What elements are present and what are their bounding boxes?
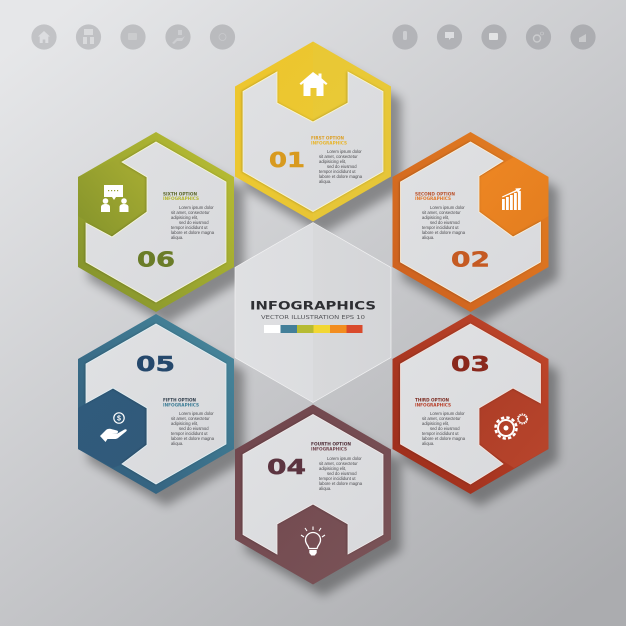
label bbox=[311, 442, 351, 452]
icon: hand and coin bbox=[100, 413, 127, 442]
label bbox=[415, 192, 455, 201]
body text: labore et dolore magna bbox=[171, 436, 215, 441]
body text: sit amet, consectetur bbox=[171, 416, 210, 421]
body text: aliqua. bbox=[422, 235, 434, 240]
body text: tempor incididunt ut bbox=[171, 225, 208, 230]
label: INFOGRAPHICS bbox=[163, 402, 199, 408]
icon: clock bbox=[210, 24, 235, 50]
icon: camera bbox=[120, 24, 146, 50]
body text: labore et dolore magna bbox=[171, 230, 215, 235]
body text: Lorem ipsum dolor bbox=[430, 205, 465, 210]
body text: tempor incididunt ut bbox=[319, 476, 356, 481]
body text: sed do eiusmod bbox=[430, 426, 460, 431]
body text: sed do eiusmod bbox=[179, 220, 209, 225]
body text: aliqua. bbox=[171, 441, 183, 446]
body text: adipisicing elit, bbox=[171, 421, 198, 426]
icon: home bbox=[300, 72, 328, 96]
icon: gears bbox=[496, 414, 528, 438]
icon: people bbox=[76, 24, 101, 50]
inner card bbox=[86, 142, 226, 302]
label bbox=[163, 192, 199, 201]
inner card bbox=[86, 324, 226, 484]
icon: hand bbox=[165, 24, 191, 50]
body text: sit amet, consectetur bbox=[422, 210, 461, 215]
body text: Lorem ipsum dolor bbox=[179, 205, 214, 210]
body text: adipisicing elit, bbox=[319, 466, 346, 471]
icon: home bbox=[31, 24, 57, 50]
number: 03 bbox=[451, 352, 490, 376]
number: 05 bbox=[136, 352, 175, 376]
label: INFOGRAPHICS bbox=[311, 140, 347, 146]
panel: option 3 bbox=[392, 314, 548, 494]
inner card bbox=[400, 324, 540, 484]
body text: sit amet, consectetur bbox=[319, 154, 358, 159]
label: SECOND OPTION bbox=[415, 192, 455, 196]
label: INFOGRAPHICS bbox=[311, 446, 347, 452]
center hexagon panel bbox=[235, 222, 391, 402]
icon background hexagon bbox=[78, 388, 147, 468]
icon: speech bbox=[437, 24, 462, 50]
label: FOURTH OPTION bbox=[311, 442, 351, 446]
inner card bbox=[243, 414, 383, 554]
body text: labore et dolore magna bbox=[422, 230, 466, 235]
panel: option 6 bbox=[78, 132, 234, 312]
body text: sit amet, consectetur bbox=[171, 210, 210, 215]
body text: sed do eiusmod bbox=[327, 164, 357, 169]
number: 06 bbox=[137, 248, 175, 272]
icon: bulb bbox=[301, 526, 325, 556]
panel: option 2 bbox=[392, 132, 548, 312]
body text: labore et dolore magna bbox=[319, 481, 363, 486]
body text: aliqua. bbox=[319, 179, 331, 184]
body text: sed do eiusmod bbox=[430, 220, 460, 225]
heading: infographics: INFOGRAPHICS bbox=[250, 298, 376, 312]
subtitle: VECTOR ILLUSTRATION EPS 10 bbox=[261, 315, 365, 321]
soft shadows bbox=[88, 54, 558, 596]
body text: sed do eiusmod bbox=[327, 471, 357, 476]
icon: bulb bbox=[392, 24, 418, 50]
body text: labore et dolore magna bbox=[319, 174, 363, 179]
body text: tempor incididunt ut bbox=[422, 225, 459, 230]
body text: Lorem ipsum dolor bbox=[327, 456, 362, 461]
body text: Lorem ipsum dolor bbox=[327, 149, 362, 154]
label: INFOGRAPHICS bbox=[415, 402, 451, 408]
icon: mail bbox=[481, 24, 507, 50]
label bbox=[311, 136, 347, 146]
panel: option 4 bbox=[235, 404, 391, 584]
body text: sit amet, consectetur bbox=[319, 461, 358, 466]
icon: chat people bbox=[101, 185, 128, 212]
body text: adipisicing elit, bbox=[422, 215, 449, 220]
label: SIXTH OPTION bbox=[163, 192, 197, 196]
number: 04 bbox=[267, 455, 306, 479]
icon: gears bbox=[526, 24, 551, 50]
body text: sed do eiusmod bbox=[179, 426, 209, 431]
body text: aliqua. bbox=[422, 441, 434, 446]
body text: adipisicing elit, bbox=[422, 421, 449, 426]
body text: adipisicing elit, bbox=[319, 159, 346, 164]
top icon row left bbox=[31, 24, 235, 50]
label: FIRST OPTION bbox=[311, 136, 344, 140]
top icon row right bbox=[392, 24, 596, 50]
inner card bbox=[243, 72, 383, 212]
label: THIRD OPTION bbox=[415, 398, 449, 402]
label: FIFTH OPTION bbox=[163, 398, 196, 402]
body text: aliqua. bbox=[319, 486, 331, 491]
icon: chart bbox=[570, 24, 596, 50]
body text: tempor incididunt ut bbox=[422, 431, 459, 436]
icon: chart bbox=[502, 188, 521, 210]
body text: Lorem ipsum dolor bbox=[179, 411, 214, 416]
body text: Lorem ipsum dolor bbox=[430, 411, 465, 416]
number: 02 bbox=[451, 248, 490, 272]
body text: sit amet, consectetur bbox=[422, 416, 461, 421]
panel: option 5 bbox=[78, 314, 234, 494]
body text: tempor incididunt ut bbox=[171, 431, 208, 436]
body text: labore et dolore magna bbox=[422, 436, 466, 441]
body text: tempor incididunt ut bbox=[319, 169, 356, 174]
label bbox=[415, 398, 451, 408]
body text: adipisicing elit, bbox=[171, 215, 198, 220]
label bbox=[163, 398, 199, 408]
icon: hand and coin: $ bbox=[117, 416, 121, 422]
inner card bbox=[400, 142, 540, 302]
colour bar bbox=[264, 325, 362, 333]
icon background hexagon bbox=[78, 157, 147, 237]
icon background hexagon bbox=[479, 157, 548, 237]
number: 01 bbox=[269, 148, 305, 172]
icon background hexagon bbox=[479, 388, 548, 468]
label: INFOGRAPHICS bbox=[163, 196, 199, 201]
label: INFOGRAPHICS bbox=[415, 196, 451, 201]
body text: aliqua. bbox=[171, 235, 183, 240]
panel: option 1 bbox=[235, 42, 391, 222]
